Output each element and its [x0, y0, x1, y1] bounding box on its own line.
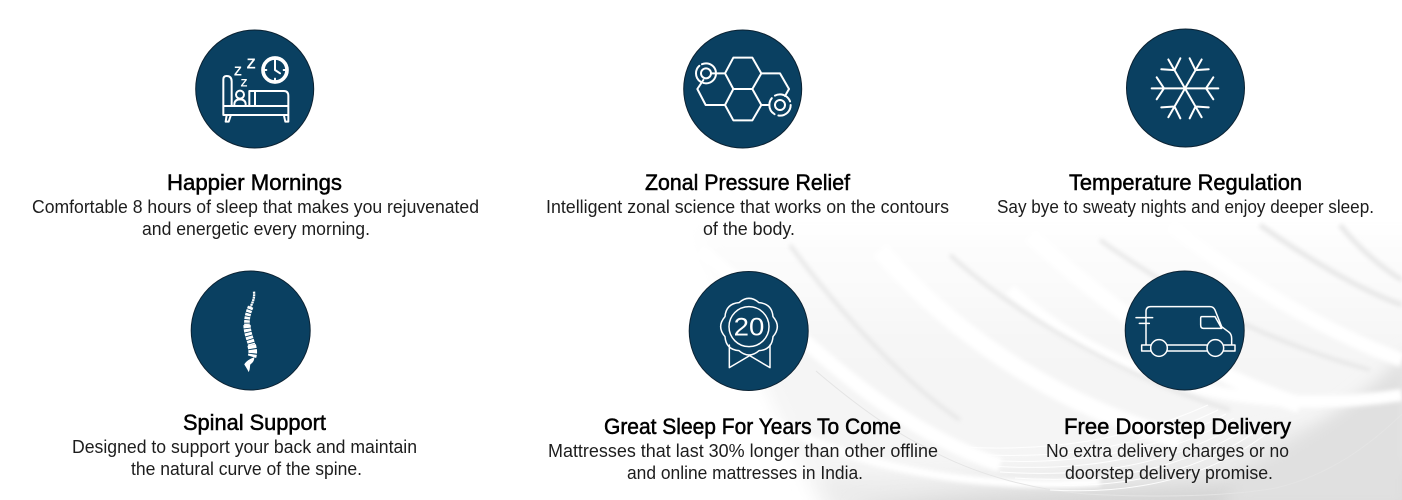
text block: [32, 197, 479, 239]
item: Happier Mornings: [32, 30, 479, 239]
icon: snowflake: [1126, 29, 1244, 147]
text block: Say bye to sweaty nights and enjoy deeper sleep.: [997, 197, 1374, 217]
text block: Comfortable 8 hours of sleep that makes you rejuvenated: [32, 197, 479, 217]
item: Temperature Regulation: [997, 29, 1374, 217]
text block: Intelligent zonal science that works on the contours: [546, 197, 949, 217]
icon: 20 year badge: 20: [734, 314, 764, 342]
item: Spinal Support: [72, 271, 417, 479]
text block: and online mattresses in India.: [627, 463, 863, 483]
text block: No extra delivery charges or no: [1046, 441, 1289, 461]
item: Great Sleep For Years To Come: [548, 272, 938, 483]
text block: Mattresses that last 30% longer than other offline: [548, 441, 938, 461]
text block: [548, 441, 938, 483]
text block: [1046, 441, 1289, 483]
icon: delivery van: [1125, 271, 1244, 390]
icon: spine: [191, 271, 310, 390]
text block: of the body.: [703, 219, 795, 239]
text block: [72, 437, 417, 479]
icon: sleeping in bed with clock: Z: [247, 56, 256, 72]
heading: Temperature Regulation: [1069, 170, 1302, 195]
icon: sleeping in bed with clock: [196, 30, 314, 148]
text block: Designed to support your back and maintain: [72, 437, 417, 457]
icon: hexagons: [684, 30, 802, 148]
heading: Zonal Pressure Relief: [645, 170, 851, 195]
text block: doorstep delivery promise.: [1065, 463, 1273, 483]
icon: 20 year badge: [689, 272, 808, 390]
text block: [546, 197, 949, 239]
item: Zonal Pressure Relief: [546, 30, 949, 239]
background: feather: [686, 215, 1402, 500]
heading: Great Sleep For Years To Come: [604, 414, 901, 439]
icon: sleeping in bed with clock: Z: [241, 77, 248, 89]
heading: Spinal Support: [183, 410, 326, 435]
heading: Free Doorstep Delivery: [1064, 414, 1291, 439]
text block: the natural curve of the spine.: [131, 459, 362, 479]
text block: and energetic every morning.: [142, 219, 370, 239]
icon: sleeping in bed with clock: Z: [234, 65, 242, 79]
item: Free Doorstep Delivery: [1046, 271, 1291, 483]
heading: Happier Mornings: [167, 170, 342, 195]
